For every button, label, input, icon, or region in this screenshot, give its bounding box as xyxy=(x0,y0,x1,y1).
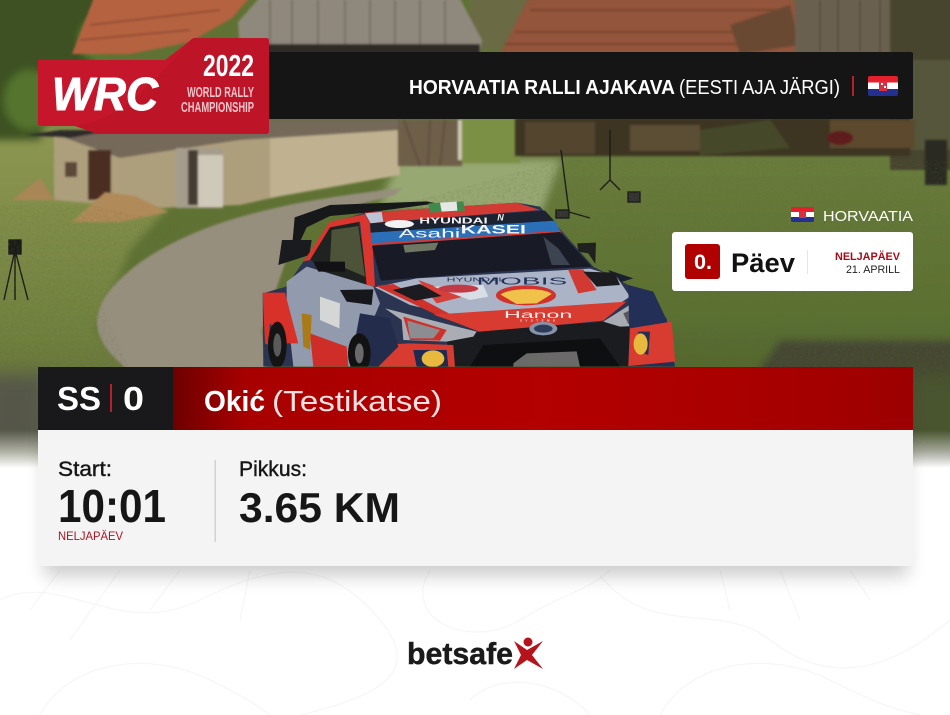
start time: NELJAPÄEV xyxy=(58,531,123,543)
icon: small Croatian flag xyxy=(791,207,814,222)
icon: Croatian flag xyxy=(868,76,898,96)
firewood piles xyxy=(12,178,168,222)
stage number block xyxy=(38,367,173,430)
stage length: Pikkus: xyxy=(239,458,307,481)
championship name: WORLD RALLY xyxy=(187,85,254,101)
barn: grey timber xyxy=(238,0,482,54)
panel drop shadow xyxy=(44,440,908,576)
bonnet: MOBIS xyxy=(477,276,568,287)
shell logo on bonnet xyxy=(496,285,556,305)
lower left bumper xyxy=(348,313,455,373)
header bar xyxy=(269,52,913,119)
details card xyxy=(38,430,913,566)
windshield xyxy=(372,232,592,281)
front grille and bumper xyxy=(447,322,630,367)
shed right xyxy=(515,118,947,185)
championship name xyxy=(181,85,254,116)
far background treeline xyxy=(460,0,530,163)
roof panels: Asahi xyxy=(399,226,460,240)
camera tripods xyxy=(4,130,640,300)
icon: betsafe star figure xyxy=(514,638,543,669)
side window and door frame xyxy=(303,214,375,305)
rally car: Hyundai i20 WRC xyxy=(263,201,675,373)
year: 2022 xyxy=(203,48,254,83)
roof panels: HYUNDAI xyxy=(419,215,488,225)
right front fender xyxy=(628,285,675,367)
gravel road xyxy=(97,188,402,470)
roof panels xyxy=(365,201,561,245)
header title: HORVAATIA RALLI AJAKAVA xyxy=(409,77,675,99)
championship name: CHAMPIONSHIP xyxy=(181,100,254,116)
stage length: 3.65 KM xyxy=(239,484,400,531)
rear wing xyxy=(278,201,437,265)
stage name bar: Okić xyxy=(204,386,265,418)
background photo: rural Croatian farm scene xyxy=(0,0,950,480)
grass: left field xyxy=(0,125,240,480)
roof panels: N xyxy=(497,212,504,222)
red nose panel: SYSTEMS xyxy=(520,318,555,322)
day card xyxy=(672,232,913,291)
stage number block: 0 xyxy=(123,380,144,417)
day number badge: 0. xyxy=(694,251,712,274)
white fade from photo to page xyxy=(0,430,950,468)
roof left xyxy=(72,0,252,54)
WRC wordmark: WRC xyxy=(52,68,159,120)
start time: Start: xyxy=(58,458,112,481)
headlights xyxy=(385,306,630,342)
stage number block: SS xyxy=(57,380,101,417)
country label: HORVAATIA xyxy=(823,209,913,225)
day label: Päev xyxy=(731,248,795,278)
bonnet xyxy=(375,269,630,315)
grass texture xyxy=(4,161,946,362)
day date: NELJAPÄEV xyxy=(835,250,901,263)
car body xyxy=(263,203,675,368)
timber wall beside house xyxy=(398,120,462,166)
stage name bar: (Testikatse) xyxy=(272,386,442,418)
barn right xyxy=(795,0,950,170)
day date xyxy=(835,250,901,276)
stage length xyxy=(239,458,400,531)
WRC 2022 logo badge xyxy=(38,38,269,134)
header title: (EESTI AJA JÄRGI) xyxy=(679,77,840,99)
betsafe logo: betsafe xyxy=(407,636,513,671)
mirror right xyxy=(577,243,633,283)
roof panels: KASEI xyxy=(461,222,526,236)
lower left dark ground xyxy=(0,375,950,450)
stage name bar xyxy=(173,367,913,430)
red nose panel xyxy=(433,302,627,332)
bonnet: HYUNDAI xyxy=(447,278,503,284)
day date: 21. APRILL xyxy=(846,264,900,276)
country label xyxy=(791,207,913,225)
start time xyxy=(58,458,166,543)
red nose panel: Hanon xyxy=(504,310,572,321)
grass: right field xyxy=(130,155,950,480)
decorative topographic pattern xyxy=(0,570,950,715)
start time: 10:01 xyxy=(58,480,166,532)
tree at left xyxy=(0,0,115,140)
header title xyxy=(409,77,840,99)
panel: stage information xyxy=(38,367,913,566)
roof right xyxy=(500,0,808,54)
day number badge xyxy=(685,244,720,279)
stone house xyxy=(26,120,400,208)
